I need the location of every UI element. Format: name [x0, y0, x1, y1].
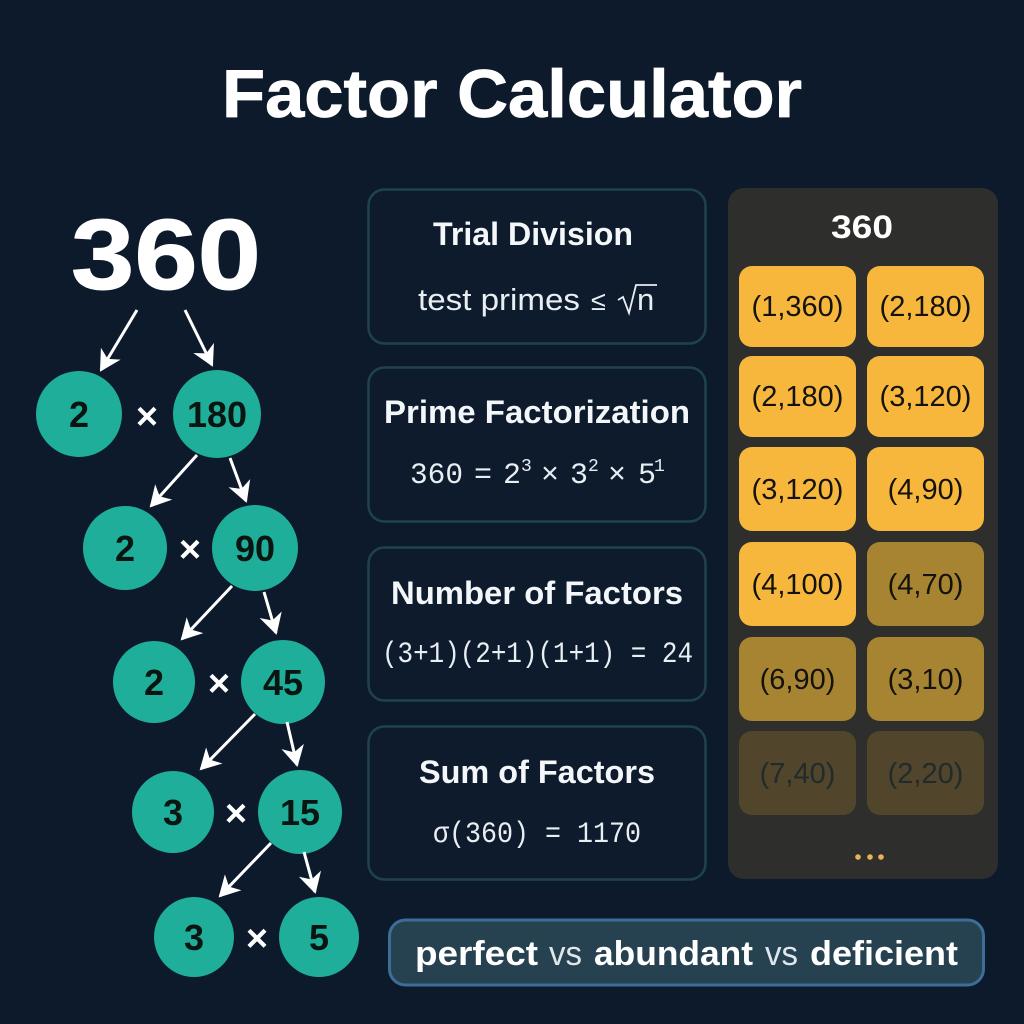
formula: n [637, 282, 654, 317]
ellipsis dots [855, 854, 884, 860]
pair: (4,100): (4,100) [752, 569, 843, 601]
pair: (4,100) [739, 542, 856, 626]
pair: (2,20) faded [867, 731, 984, 815]
callout: number classification: abundant [594, 935, 753, 973]
callout: number classification: deficient [810, 935, 958, 973]
heading: Number of Factors [391, 575, 683, 611]
panel: prime factorization [368, 368, 706, 522]
arrows: 45 [201, 714, 297, 769]
level 1 nodes [36, 370, 261, 458]
panel: trial division [368, 190, 706, 344]
level 1 nodes: × [136, 396, 158, 438]
pair: (6,90) dimmed [739, 637, 856, 721]
formula: test primes [418, 282, 580, 317]
formula: 5 [638, 459, 656, 493]
level 5 nodes: × [246, 918, 268, 960]
formula: 2 [588, 457, 599, 477]
formula [410, 457, 665, 493]
pair: (2,180) second: (2,180) [752, 381, 843, 413]
formula: × [541, 459, 559, 493]
formula [418, 282, 657, 317]
pair: (2,20) faded: (2,20) [888, 758, 963, 790]
pair: (3,10) dimmed: (3,10) [888, 664, 963, 696]
pair: (3,120) second [739, 447, 856, 531]
pair: (3,10) dimmed [867, 637, 984, 721]
level 4 nodes: × [225, 793, 247, 835]
level 3 nodes: × [208, 663, 230, 705]
formula: 3 [570, 459, 588, 493]
formula: (3+1)(2+1)(1+1) = 24 [382, 638, 693, 672]
formula: 360 [410, 459, 463, 493]
heading: Prime Factorization [384, 394, 690, 430]
pair: (4,70) dimmed [867, 542, 984, 626]
arrows: 15 [220, 843, 315, 896]
callout: number classification [390, 920, 984, 985]
pair: (1,360) [739, 266, 856, 347]
level 5 nodes: 5 [309, 917, 329, 958]
formula: ≤ [591, 286, 606, 316]
level 1 nodes: 2 [69, 394, 89, 435]
callout: number classification: vs [765, 935, 798, 973]
pair: (7,40) faded: (7,40) [760, 758, 835, 790]
level 4 nodes [132, 770, 342, 854]
level 3 nodes: 2 [144, 662, 164, 703]
pair: (4,70) dimmed: (4,70) [888, 569, 963, 601]
level 2 nodes [83, 505, 298, 591]
callout: number classification: vs [549, 935, 582, 973]
formula: 1 [654, 457, 665, 477]
level 2 nodes: × [179, 529, 201, 571]
arrows: 90 [182, 586, 276, 639]
level 4 nodes: 15 [280, 792, 320, 833]
title: Factor Calculator [222, 56, 802, 132]
formula: 2 [503, 459, 521, 493]
level 2 nodes: 2 [115, 528, 135, 569]
pair: (1,360): (1,360) [752, 291, 843, 323]
pair: (2,180): (2,180) [880, 291, 971, 323]
formula: = [474, 459, 492, 493]
factor tree [36, 199, 359, 977]
pair: (3,120) second: (3,120) [752, 474, 843, 506]
arrows: 180 [151, 455, 246, 506]
arrows: root [101, 310, 212, 370]
formula: × [608, 459, 626, 493]
level 1 nodes: 180 [187, 394, 247, 435]
pair: (6,90) dimmed: (6,90) [760, 664, 835, 696]
panel heading: 360 [831, 209, 893, 245]
heading: Trial Division [433, 216, 633, 252]
pair: (2,180) [867, 266, 984, 347]
panel: number of factors [368, 548, 706, 700]
heading: Sum of Factors [419, 754, 655, 790]
pair: (4,90): (4,90) [888, 474, 963, 506]
formula: 3 [521, 457, 532, 477]
level 3 nodes [113, 640, 325, 724]
callout: number classification: perfect [415, 935, 538, 973]
pair: (7,40) faded [739, 731, 856, 815]
pair: (4,90) [867, 447, 984, 531]
formula: σ(360) = 1170 [433, 818, 641, 852]
level 2 nodes: 90 [235, 528, 275, 569]
pair: (2,180) second [739, 356, 856, 437]
panel: sum of factors [368, 726, 706, 880]
level 4 nodes: 3 [163, 792, 183, 833]
root number: 360 [71, 199, 261, 311]
panel: factor pairs [728, 188, 998, 879]
pair: (3,120) [867, 356, 984, 437]
level 3 nodes: 45 [263, 662, 303, 703]
level 5 nodes: 3 [184, 917, 204, 958]
level 5 nodes [154, 897, 359, 977]
pair: (3,120): (3,120) [880, 381, 971, 413]
